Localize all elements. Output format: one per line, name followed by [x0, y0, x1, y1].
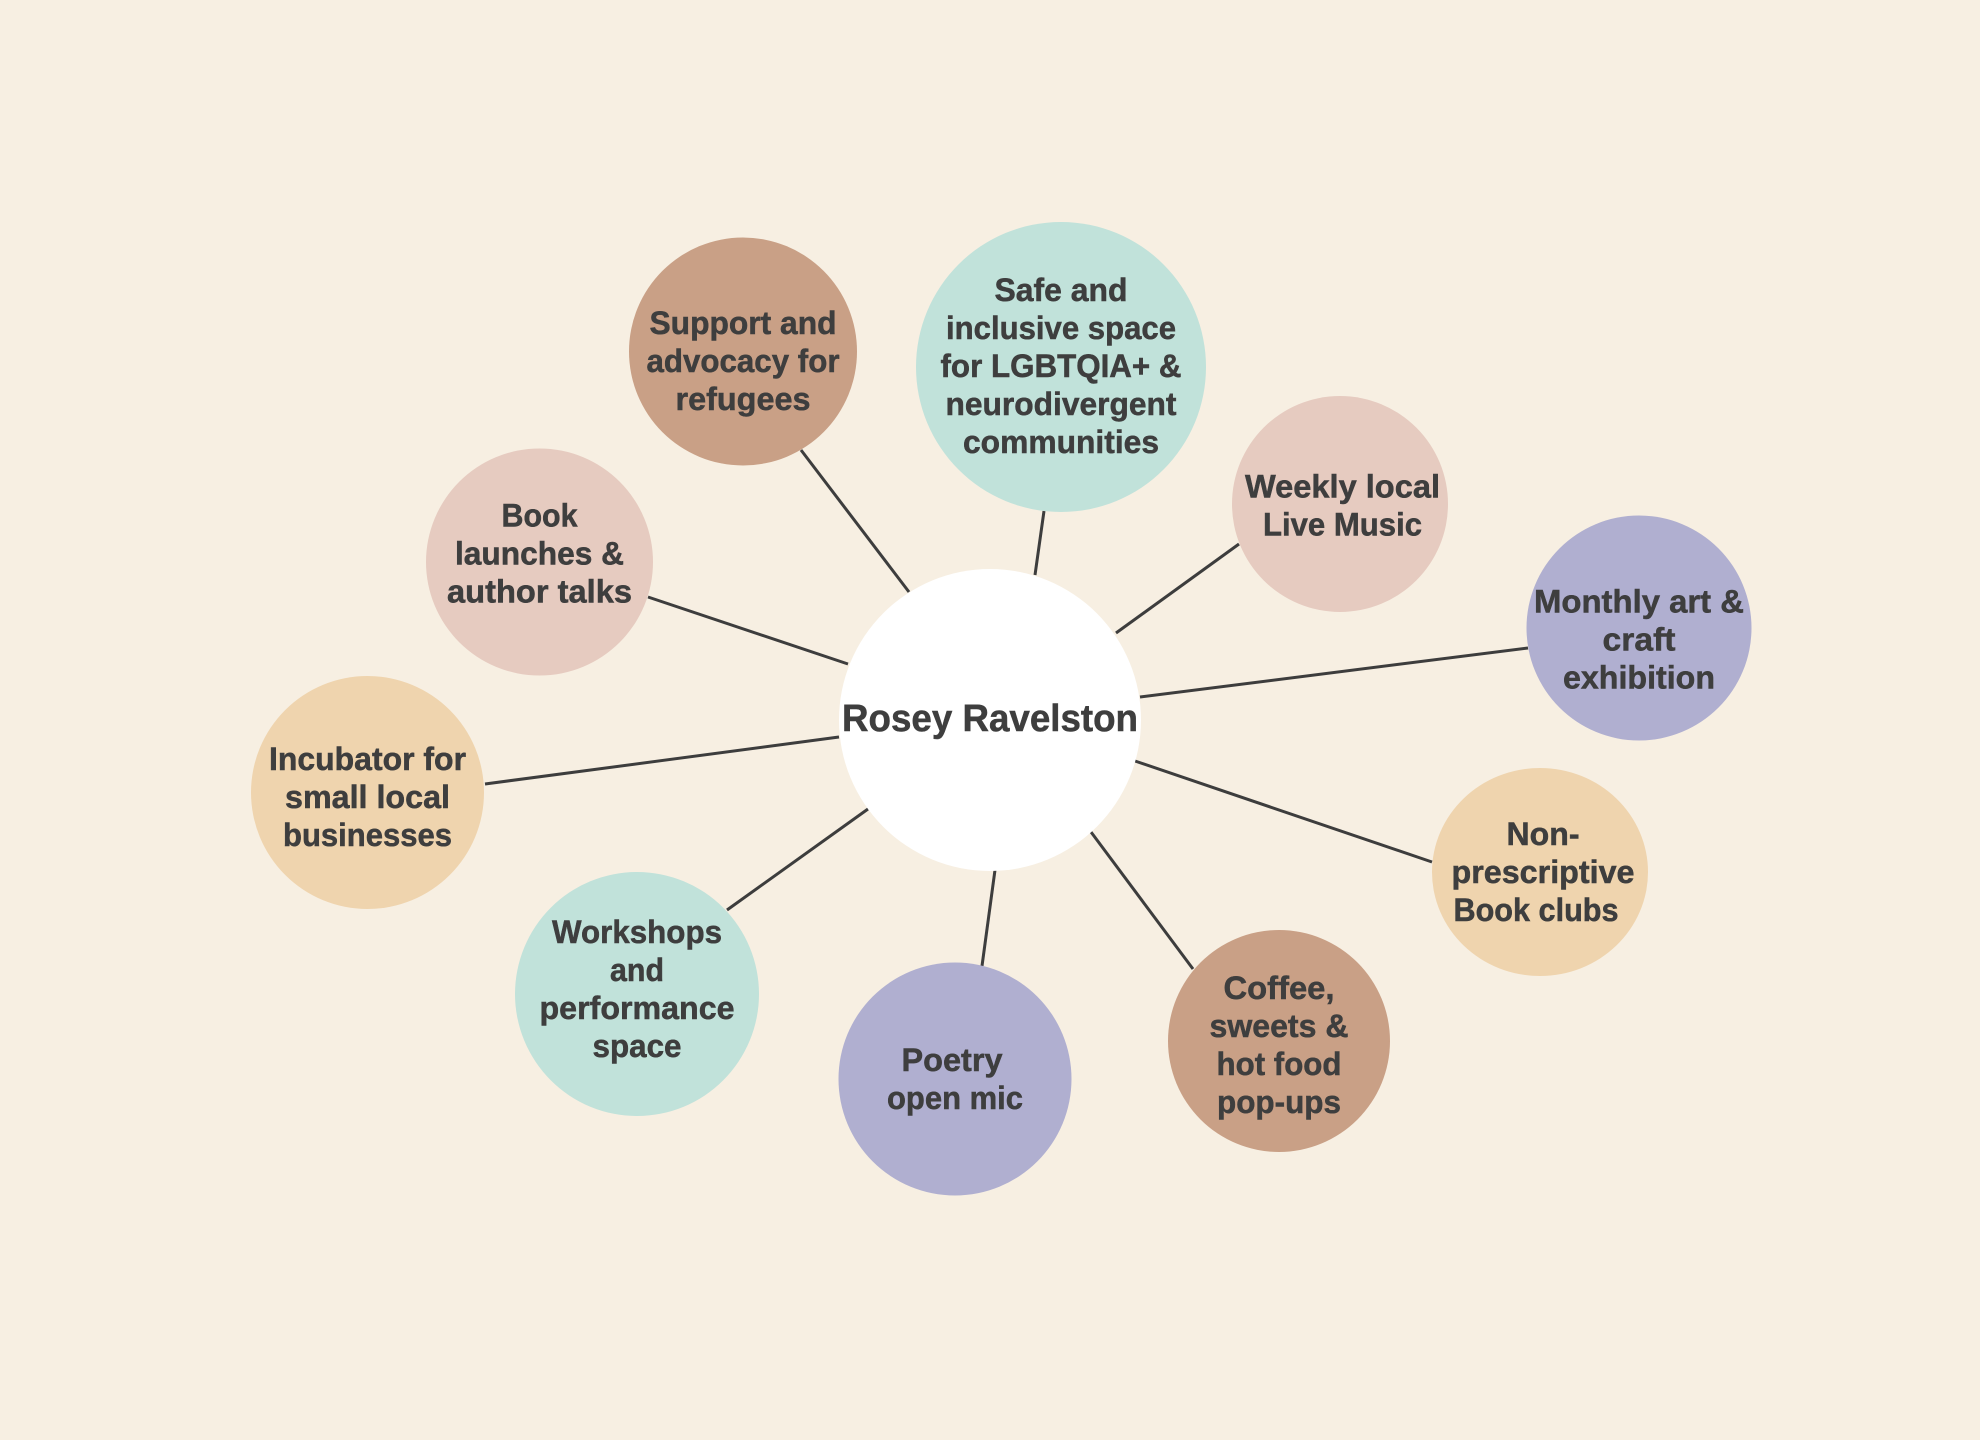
node: Coffee, sweets & hot food pop-ups — [1168, 930, 1390, 1152]
central node: Rosey Ravelston: Rosey Ravelston — [842, 698, 1138, 740]
node: Support and advocacy for refugees: advocacy for — [646, 343, 840, 379]
node: Poetry open mic — [838, 962, 1072, 1196]
node: Incubator for small local businesses: small local — [285, 779, 450, 815]
node: Safe and inclusive space — [916, 222, 1206, 512]
node: Coffee, sweets & hot food pop-ups: pop-ups — [1217, 1084, 1341, 1120]
node: Monthly art & craft exhibition: Monthly art & — [1534, 584, 1744, 620]
node: Support and advocacy for refugees: refugees — [676, 381, 810, 417]
node: Safe and inclusive space: Safe and — [994, 272, 1128, 308]
node: Support and advocacy for refugees: Support and — [650, 305, 836, 341]
node: Incubator for small local businesses: businesses — [283, 817, 452, 853]
node: Incubator for small local businesses — [251, 676, 484, 909]
node: Weekly local Live Music: Weekly local — [1245, 468, 1440, 504]
node: Weekly local Live Music — [1232, 396, 1448, 612]
node: Safe and inclusive space: neurodivergent — [946, 386, 1177, 422]
node: Book launches & author talks: Book — [502, 498, 578, 534]
node: Monthly art & craft exhibition: craft — [1602, 622, 1676, 658]
node: Safe and inclusive space: for LGBTQIA+ & — [940, 348, 1182, 384]
node: Book launches & author talks — [426, 448, 653, 676]
node: Monthly art & craft exhibition — [1526, 516, 1752, 740]
node: Workshops and performance space: space — [592, 1028, 682, 1064]
node: Coffee, sweets & hot food pop-ups: Coffee, — [1224, 970, 1334, 1006]
node: Workshops and performance space: and — [610, 952, 664, 988]
node: Support and advocacy for refugees — [629, 238, 857, 466]
central node: Rosey Ravelston — [839, 569, 1141, 871]
connector lines — [485, 450, 1528, 969]
node: Workshops and performance space — [515, 872, 759, 1116]
node: Monthly art & craft exhibition: exhibition — [1563, 660, 1715, 696]
node: Weekly local Live Music: Live Music — [1263, 506, 1422, 542]
node: Poetry open mic: open mic — [887, 1080, 1023, 1116]
node: Safe and inclusive space: inclusive space — [946, 310, 1176, 346]
node: Non-prescriptive Book clubs: Non- — [1506, 816, 1580, 852]
node: Book launches & author talks: author talks — [447, 574, 632, 610]
node: Safe and inclusive space: communities — [963, 424, 1159, 460]
node: Book launches & author talks: launches & — [455, 536, 624, 572]
node: Non-prescriptive Book clubs: Book clubs — [1454, 892, 1618, 928]
node: Non-prescriptive Book clubs: prescriptive — [1452, 854, 1634, 890]
node: Coffee, sweets & hot food pop-ups: sweets & — [1210, 1008, 1348, 1044]
node: Incubator for small local businesses: Incubator for — [269, 741, 466, 777]
node: Workshops and performance space: performance — [540, 990, 734, 1026]
node: Coffee, sweets & hot food pop-ups: hot food — [1216, 1046, 1342, 1082]
node: Workshops and performance space: Workshops — [552, 914, 722, 950]
node: Non-prescriptive Book clubs — [1432, 768, 1648, 976]
node: Poetry open mic: Poetry — [902, 1042, 1003, 1078]
